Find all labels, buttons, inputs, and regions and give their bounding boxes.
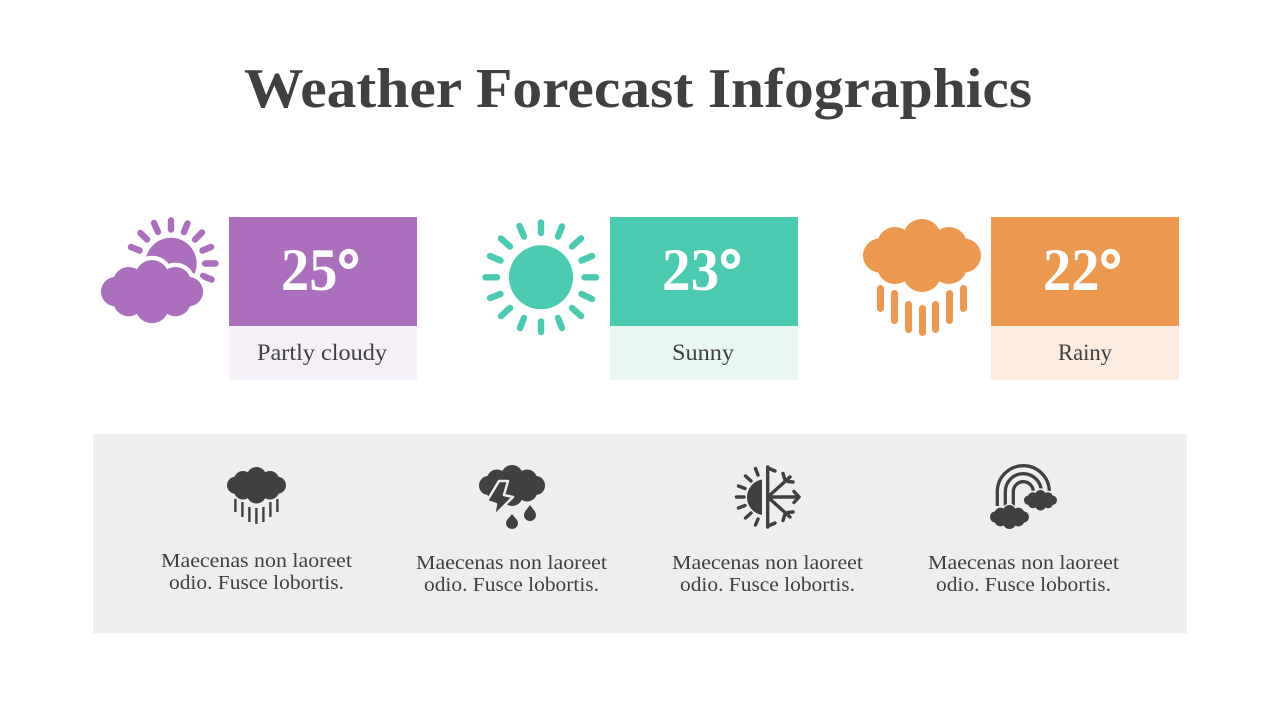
temperature tile [991, 217, 1179, 326]
temperature value: 22° [1043, 237, 1122, 303]
icon: sun behind cloud [101, 220, 216, 323]
caption: Maecenas non laoreet [672, 552, 863, 574]
title: Weather Forecast Infographics [244, 58, 1032, 120]
icon: rainbow with clouds [990, 466, 1057, 529]
label: Partly cloudy [257, 340, 388, 365]
temperature value: 23° [662, 237, 742, 303]
caption: odio. Fusce lobortis. [424, 574, 599, 596]
label tile [610, 326, 798, 380]
label tile [991, 326, 1179, 380]
temperature tile [229, 217, 417, 326]
caption: odio. Fusce lobortis. [936, 574, 1111, 596]
temperature value: 25° [281, 237, 360, 303]
icon: half sun half snowflake [736, 467, 799, 527]
label: Sunny [672, 340, 735, 365]
icon: drizzle cloud [227, 467, 286, 524]
caption: odio. Fusce lobortis. [169, 572, 344, 594]
item: hot and cold [672, 467, 863, 596]
caption: Maecenas non laoreet [928, 552, 1119, 574]
item: thunderstorm [416, 465, 607, 596]
band background [93, 434, 1187, 633]
panel: rainy [863, 217, 1179, 380]
panel: partly cloudy [101, 217, 417, 380]
label: Rainy [1058, 340, 1112, 365]
label tile [229, 326, 417, 380]
icon: storm cloud with lightning and drops [479, 465, 545, 529]
caption: Maecenas non laoreet [161, 550, 352, 572]
panel: lower band [93, 434, 1187, 633]
panel: sunny [486, 217, 798, 380]
icon: rain cloud [863, 219, 981, 336]
item: drizzle [161, 467, 352, 594]
icon: sun [486, 222, 596, 332]
item: rainbow [928, 466, 1119, 596]
caption: odio. Fusce lobortis. [680, 574, 855, 596]
temperature tile [610, 217, 798, 326]
caption: Maecenas non laoreet [416, 552, 607, 574]
